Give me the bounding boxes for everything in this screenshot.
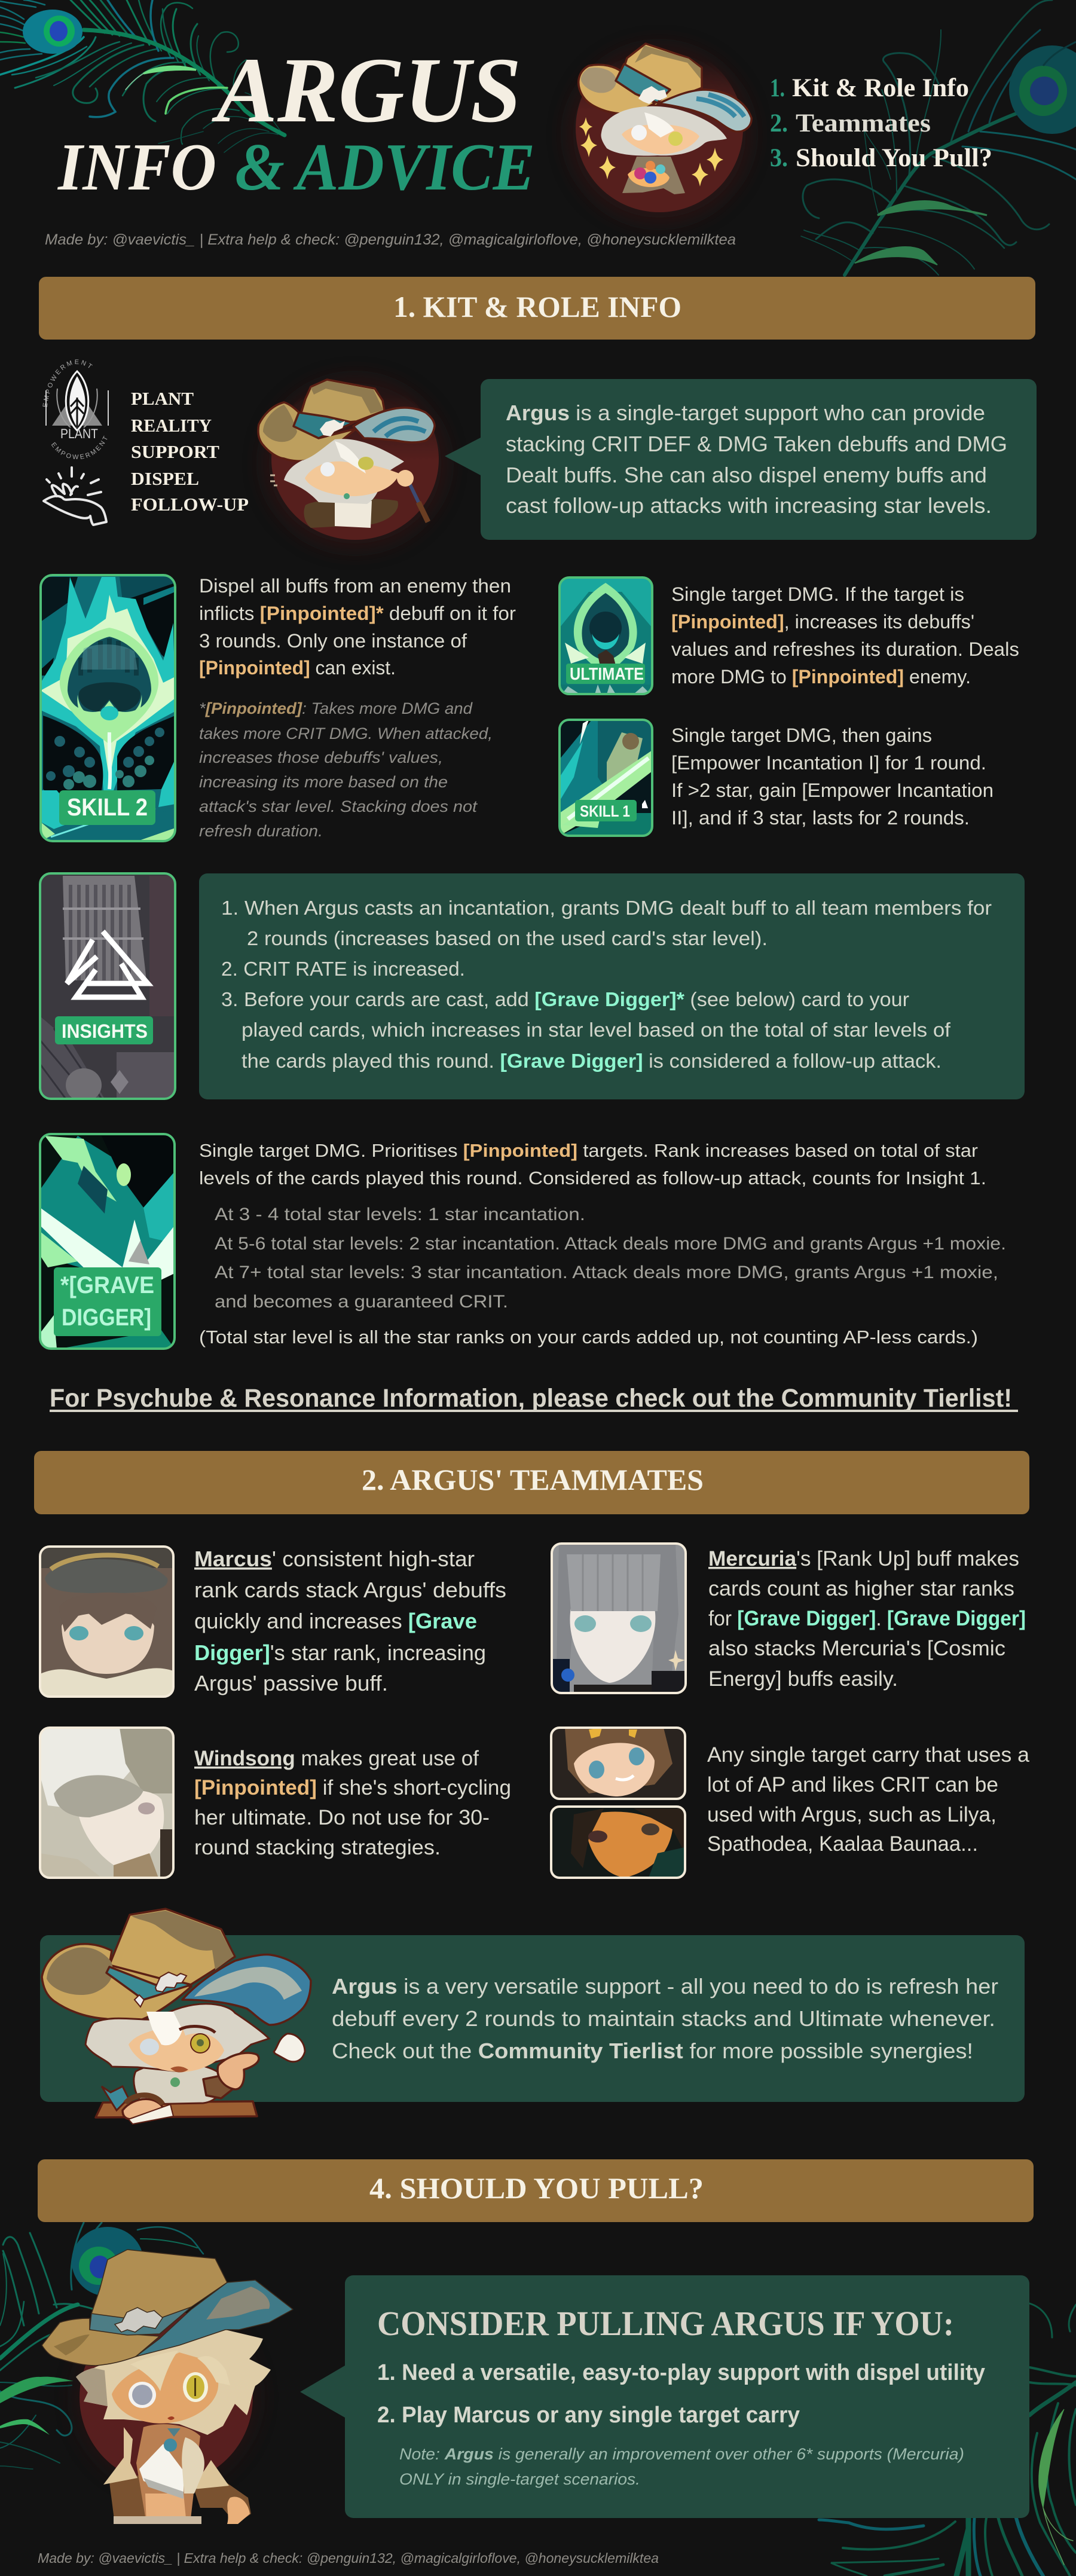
notice: community tierlist: For Psychube & Resonance Information, please check out the Community Tierlist! [50, 1384, 1012, 1413]
icon: plant afflatus emblem: PLANT [60, 426, 98, 441]
text: other carries: Spathodea, Kaalaa Baunaa... [707, 1832, 978, 1856]
portrait: Mercuria [552, 1544, 686, 1693]
table of contents: 3. [770, 144, 788, 172]
feather eye: bottom left [72, 2227, 143, 2296]
text: Grave Digger description: and becomes a guaranteed CRIT. [215, 1292, 508, 1312]
panel: Insights description: 2. CRIT RATE is increased. [221, 958, 465, 980]
panel: versatile support summary [40, 1935, 1025, 2102]
table of contents: Kit & Role Info [792, 74, 969, 102]
text: Pinpointed note: *[Pinpointed]: Takes more DMG and [199, 699, 473, 717]
table of contents: Should You Pull? [796, 144, 992, 172]
text: other carries: lot of AP and likes CRIT can be [707, 1773, 998, 1796]
role tags: REALITY [131, 415, 212, 436]
text: Ultimate description: [Pinpointed], increases its debuffs' [671, 611, 974, 632]
icon: plant afflatus emblem: EMPOWERMENT [51, 435, 108, 459]
note: ONLY in single-target scenarios. [399, 2470, 640, 2488]
text: Grave Digger description: (Total star level is all the star ranks on your cards added up, not counting AP-less cards.) [199, 1327, 978, 1347]
text: Mercuria: also stacks Mercuria's [Cosmic [708, 1637, 1005, 1660]
portrait: Spathodea [551, 1807, 685, 1878]
chibi: Argus full body [42, 2250, 293, 2524]
card art: Ultimate: ULTIMATE [570, 665, 644, 684]
card art: Insights: INSIGHTS [62, 1020, 148, 1042]
decorative peacock feather: top right [801, 0, 1076, 275]
text: Marcus [194, 1547, 506, 1695]
feather eye: top right [1009, 42, 1076, 134]
table of contents: Teammates [796, 109, 931, 137]
text: Skill 1 description: II], and if 3 star, lasts for 2 rounds. [671, 807, 970, 829]
text: Marcus: Digger]'s star rank, increasing [194, 1640, 486, 1665]
note: Note: Argus is generally an improvement over other 6* supports (Mercuria) [399, 2445, 964, 2463]
icon: plant afflatus emblem: EMPOWERMENT [42, 359, 93, 407]
text: Marcus: Marcus' consistent high-star [194, 1547, 475, 1571]
panel: Insights description: 1. When Argus casts an incantation, grants DMG dealt buff to all team members for [221, 897, 992, 919]
text: Skill 2 description: inflicts [Pinpointed]* debuff on it for [199, 603, 516, 624]
card art: Skill 2 [41, 575, 175, 841]
card art: Ultimate [560, 577, 652, 694]
role tags: FOLLOW-UP [131, 494, 249, 515]
text: Grave Digger description: At 5-6 total star levels: 2 star incantation. Attack deals more DMG and grants Argus +1 moxie. [215, 1234, 1006, 1254]
text: Marcus: Argus' passive buff. [194, 1671, 388, 1695]
text: Pinpointed note: increasing its more based on the [199, 773, 448, 791]
role tags: DISPEL [131, 468, 199, 489]
card art: Insights [40, 873, 175, 1102]
callout: Argus summary: Argus is a single-target support who can provide [506, 401, 985, 425]
title: ARGUS [211, 38, 521, 142]
decorative peacock feather: top left [0, 0, 285, 152]
text: Pinpointed note: takes more CRIT DMG. When attacked, [199, 725, 493, 742]
role tags [131, 388, 249, 515]
table of contents: 2. [770, 109, 788, 137]
text: Grave Digger description: Single target DMG. Prioritises [Pinpointed] targets. Rank increases based on total of star [199, 1141, 978, 1161]
panel: Insights description: 2 rounds (increases based on the used card's star level). [247, 927, 768, 949]
text: Skill 2 description: [Pinpointed] can exist. [199, 657, 396, 679]
card art: Skill 1: SKILL 1 [580, 802, 630, 820]
text: Marcus: quickly and increases [Grave [194, 1609, 477, 1633]
chibi: Argus with staff [258, 377, 448, 550]
chibi: Argus with gems [567, 44, 752, 224]
panel: Insights description [199, 873, 1025, 1099]
section bar: 4. Should You Pull? [38, 2159, 1034, 2222]
panel: consider pulling Argus [300, 2275, 1029, 2518]
section bar: 2. Argus' Teammates [34, 1451, 1029, 1514]
text: Pinpointed note: attack's star level. Stacking does not [199, 797, 478, 815]
text: Pinpointed note [199, 699, 493, 840]
chibi: Argus pointing [42, 1909, 311, 2124]
panel: versatile support summary: Check out the Community Tierlist for more possible synergies! [332, 2039, 973, 2063]
title [57, 38, 535, 204]
text: Windsong: Windsong makes great use of [194, 1747, 479, 1770]
callout: Argus summary: stacking CRIT DEF & DMG Taken debuffs and DMG [506, 432, 1007, 456]
footer credits: Made by: @vaevictis_ | Extra help & check: @penguin132, @magicalgirloflove, @honeysucklemilktea [38, 2550, 659, 2566]
callout: Argus summary [445, 379, 1037, 540]
section bar: 4. Should You Pull?: 4. SHOULD YOU PULL? [369, 2171, 704, 2205]
decorative peacock feather: bottom left [0, 2223, 203, 2469]
reasons [377, 2360, 985, 2428]
panel: Insights description: the cards played this round. [Grave Digger] is considered a follow-up attack. [242, 1050, 941, 1072]
text: Mercuria [708, 1547, 1026, 1691]
text: Windsong [194, 1747, 511, 1859]
portrait: Marcus [40, 1547, 173, 1697]
text: Windsong: round stacking strategies. [194, 1836, 441, 1859]
text: Pinpointed note: refresh duration. [199, 822, 323, 840]
title: ADVICE [293, 130, 535, 204]
text: Grave Digger description: At 7+ total star levels: 3 star incantation. Attack deals more DMG, grants Argus +1 moxie, [215, 1263, 998, 1282]
decorative peacock feather: bottom right [819, 2303, 1076, 2576]
text: Mercuria: Energy] buffs easily. [708, 1667, 898, 1691]
text: Pinpointed note: increases those debuffs' values, [199, 748, 443, 766]
text: Grave Digger description [199, 1141, 1006, 1347]
text: Ultimate description: Single target DMG. If the target is [671, 583, 964, 605]
text: Ultimate description [671, 583, 1019, 687]
text: Ultimate description: more DMG to [Pinpointed] enemy. [671, 666, 971, 687]
panel: Insights description: 3. Before your cards are cast, add [Grave Digger]* (see below) card to your [221, 988, 909, 1010]
text: Skill 1 description: Single target DMG, then gains [671, 725, 932, 746]
title: & [235, 130, 285, 204]
title: INFO [57, 130, 216, 204]
text: Grave Digger description: At 3 - 4 total star levels: 1 star incantation. [215, 1205, 585, 1224]
credits: Made by: @vaevictis_ | Extra help & check: @penguin132, @magicalgirloflove, @honeysucklemilktea [45, 231, 736, 248]
text: Windsong: her ultimate. Do not use for 30- [194, 1806, 490, 1829]
portrait: Windsong [40, 1728, 173, 1878]
text: Skill 1 description: If >2 star, gain [Empower Incantation [671, 780, 994, 801]
card art: Grave Digger: *[GRAVE [60, 1272, 154, 1298]
section bar: 1. Kit & Role Info [39, 277, 1035, 340]
card art: Grave Digger: DIGGER] [62, 1304, 151, 1331]
text: other carries: used with Argus, such as Lilya, [707, 1803, 996, 1826]
text: Skill 2 description: 3 rounds. Only one instance of [199, 630, 467, 652]
text: other carries: Any single target carry that uses a [707, 1743, 1030, 1767]
text: other carries [707, 1743, 1030, 1856]
card art: Skill 2: SKILL 2 [67, 793, 148, 821]
text: Windsong: [Pinpointed] if she's short-cycling [194, 1776, 511, 1799]
panel: Insights description: played cards, which increases in star level based on the total of star levels of [242, 1019, 951, 1041]
text: Mercuria: Mercuria's [Rank Up] buff makes [708, 1547, 1019, 1570]
section bar: 2. Argus' Teammates: 2. ARGUS' TEAMMATES [362, 1463, 704, 1496]
text: Marcus: rank cards stack Argus' debuffs [194, 1578, 506, 1602]
text: Mercuria: cards count as higher star ranks [708, 1577, 1014, 1600]
text: Mercuria: for [Grave Digger]. [Grave Digger] [708, 1607, 1026, 1630]
reasons: 1. Need a versatile, easy-to-play support with dispel utility [377, 2360, 985, 2385]
callout: Argus summary: Dealt buffs. She can also dispel enemy buffs and [506, 463, 987, 487]
icon: dispel hand [44, 467, 106, 525]
note [399, 2445, 964, 2488]
panel: versatile support summary: debuff every 2 rounds to maintain stacks and Ultimate whenever. [332, 2006, 995, 2031]
icon: plant afflatus emblem [42, 359, 109, 459]
card art: Skill 1 [560, 720, 652, 836]
panel: versatile support summary: Argus is a very versatile support - all you need to do is refresh her [332, 1974, 998, 1999]
feather eye: top left [23, 10, 82, 54]
portrait: Lilya [551, 1728, 685, 1799]
text: Skill 1 description [671, 725, 994, 829]
callout: Argus summary: cast follow-up attacks with increasing star levels. [506, 493, 992, 518]
reasons: 2. Play Marcus or any single target carry [377, 2403, 800, 2428]
role tags: PLANT [131, 388, 194, 409]
heading: CONSIDER PULLING ARGUS IF YOU: [377, 2304, 954, 2343]
text: Grave Digger description: levels of the cards played this round. Considered as follow-up attack, counts for Insight 1. [199, 1168, 986, 1188]
role tags: SUPPORT [131, 441, 219, 462]
section bar: 1. Kit & Role Info: 1. KIT & ROLE INFO [393, 290, 681, 323]
text: Skill 2 description [199, 575, 516, 679]
text: Skill 2 description: Dispel all buffs from an enemy then [199, 575, 511, 597]
text: Skill 1 description: [Empower Incantation I] for 1 round. [671, 752, 986, 774]
table of contents [770, 74, 992, 172]
table of contents: 1. [770, 74, 785, 102]
card art: Grave Digger [40, 1134, 175, 1349]
text: Ultimate description: values and refreshes its duration. Deals [671, 638, 1019, 660]
